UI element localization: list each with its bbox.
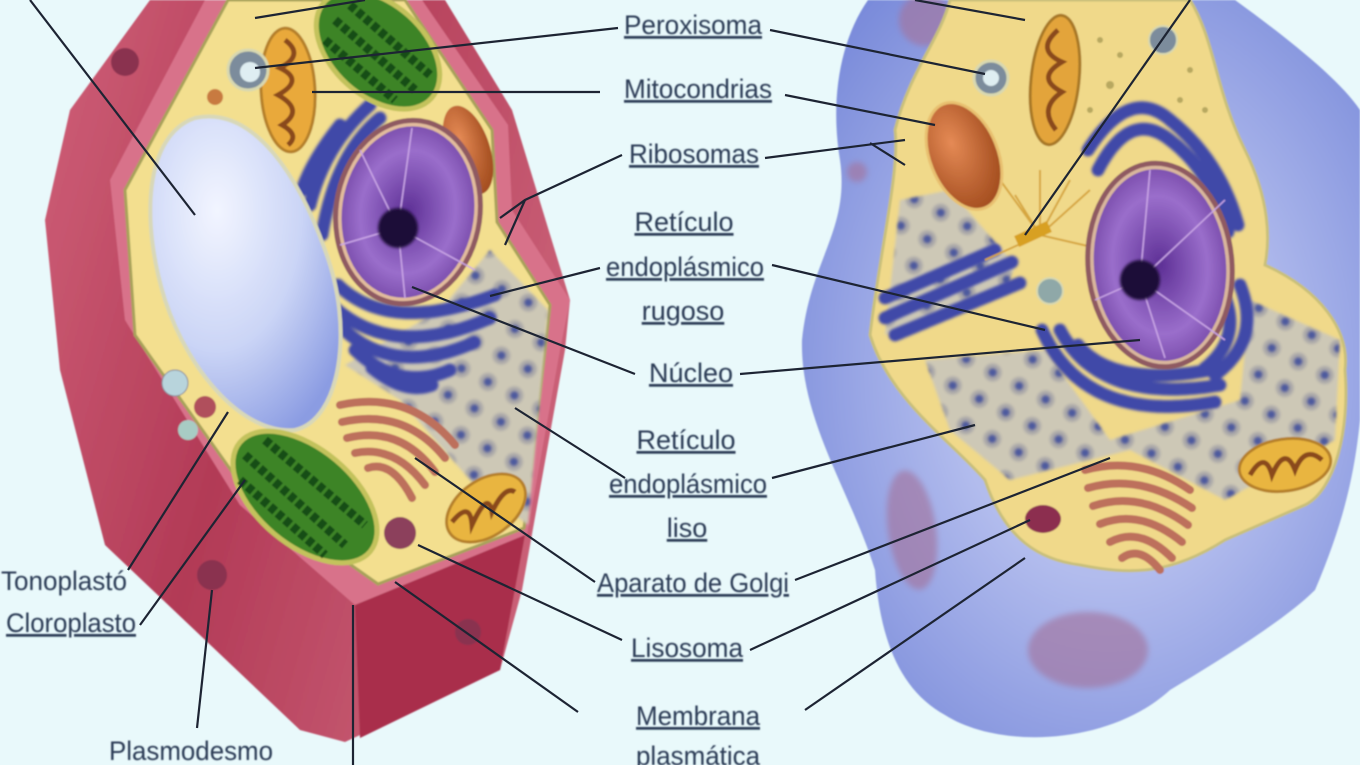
animal lysosome — [1025, 505, 1061, 533]
chloroplast top — [294, 0, 462, 132]
label: Retículo endoplásmico liso: endoplásmico — [609, 469, 767, 499]
labels — [1, 10, 789, 765]
label: Peroxisoma: Peroxisoma — [624, 10, 763, 40]
label: Membrana plasmática — [636, 701, 761, 765]
label: Retículo endoplásmico rugoso: endoplásmico — [606, 252, 764, 282]
animal peroxisome — [974, 61, 1008, 95]
chloroplast bottom — [209, 406, 401, 588]
animal mitochondrion right — [1236, 433, 1334, 497]
animal mitochondrion top — [1024, 13, 1086, 147]
mitochondrion top — [258, 27, 318, 153]
cytoplasm — [125, 0, 550, 584]
peroxisome — [228, 50, 268, 90]
nucleus — [324, 111, 492, 313]
label: Núcleo: Núcleo — [649, 358, 733, 388]
rough reticulum — [302, 105, 495, 388]
mitochondrion bottom — [434, 460, 538, 556]
animal rough reticulum — [885, 108, 1247, 406]
label: Retículo endoplásmico liso: Retículo — [636, 425, 736, 455]
animal nucleus — [1079, 157, 1241, 373]
plant cell — [45, 0, 570, 742]
animal nucleolus — [1120, 260, 1160, 300]
label: Tonoplasto: Tonoplastó — [1, 566, 127, 596]
animal inner cytoplasm — [870, 0, 1346, 571]
blue cell blobs — [847, 0, 1148, 688]
vacuole — [150, 117, 341, 430]
label: Cloroplasto: Cloroplasto — [6, 608, 136, 638]
label: Retículo endoplásmico rugoso — [606, 207, 764, 326]
blue cytoplasm outer — [802, 0, 1360, 737]
wall cut face — [110, 0, 570, 605]
animal mitochondrion orange — [911, 91, 1017, 221]
animal cell — [802, 0, 1360, 737]
label: Retículo endoplásmico rugoso: rugoso — [642, 296, 724, 326]
plasmodesmata — [111, 48, 481, 645]
cell wall — [45, 0, 570, 742]
label: Retículo endoplásmico liso — [609, 425, 767, 543]
small vesicles — [162, 89, 223, 440]
label: Mitocondrias: Mitocondrias — [624, 74, 772, 104]
nucleolus — [378, 208, 418, 248]
label: Membrana plasmática: Membrana — [636, 701, 761, 731]
plant mitochondrion orange — [433, 99, 503, 201]
label: Retículo endoplásmico rugoso: Retículo — [634, 207, 734, 237]
label: Lisosoma: Lisosoma — [631, 633, 744, 663]
speckles — [1087, 37, 1208, 113]
label: Ribosomas: Ribosomas — [629, 139, 759, 169]
animal golgi — [1085, 466, 1192, 570]
lysosome — [384, 517, 416, 549]
label: Retículo endoplásmico liso: liso — [667, 513, 707, 543]
reticulum left grey — [885, 190, 1015, 335]
label: Aparato de Golgi: Aparato de Golgi — [597, 568, 789, 598]
animal smooth reticulum — [925, 300, 1340, 500]
smooth reticulum — [345, 250, 548, 525]
golgi — [340, 402, 455, 498]
centrioles — [985, 170, 1105, 260]
